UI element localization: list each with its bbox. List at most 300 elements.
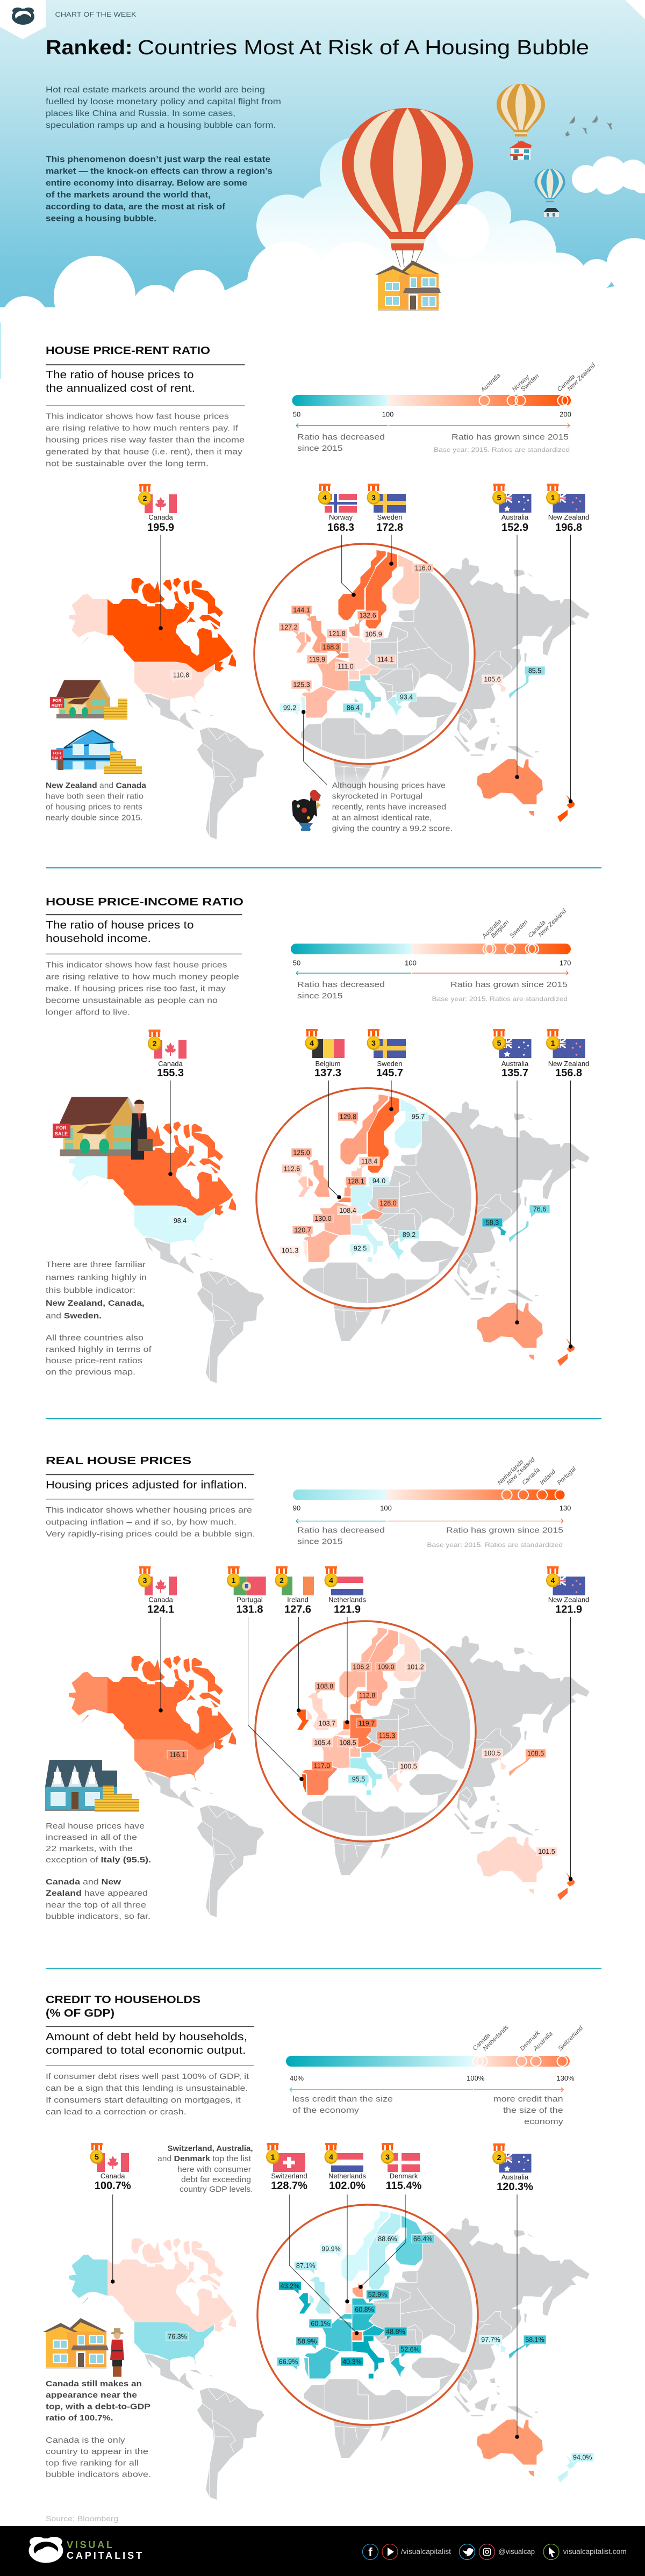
section 3 scale ticks: 100 (380, 1504, 392, 1512)
section 2 description: make. If housing prices rise too fast, it may (46, 984, 226, 994)
flag: Australia (492, 1029, 531, 1079)
for rent house illustration: RENT (52, 703, 63, 708)
section 2 scale country labels (481, 908, 568, 940)
flag: Switzerland: Switzerland (271, 2172, 307, 2180)
section 4 note: top five ranking for all (46, 2459, 139, 2468)
section 4 scale ticks: 40% (290, 2074, 304, 2082)
flag: Canada: 100.7% (95, 2180, 131, 2192)
section 3 scale country labels: Portugal (556, 1465, 577, 1486)
section 2 gradient scale (291, 944, 571, 954)
section 1 scale country labels (479, 362, 597, 394)
section 4 description (46, 2072, 249, 2117)
flag: New Zealand (546, 484, 589, 534)
section 3 description: This indicator shows whether housing prices are (46, 1506, 252, 1515)
flag: Netherlands: Netherlands (328, 2172, 367, 2180)
section 2 description: are rising relative to how much money people (46, 973, 239, 982)
section 4 note: Canada still makes an (46, 2380, 142, 2388)
section 2 world map (69, 1101, 590, 1383)
section 4 europe map (298, 2209, 496, 2442)
intro paragraph: Hot real estate markets around the world are being (46, 85, 265, 95)
section 1 scale ticks: 100 (382, 411, 393, 419)
section 1 subheading: The ratio of house prices to (46, 369, 194, 381)
orange balloon (497, 84, 545, 136)
section 4 heading (46, 1994, 200, 2019)
section 4 scale country labels: Australia (532, 2031, 554, 2053)
section 4 value labels: 52.6% (400, 2346, 420, 2354)
section 2 scale country labels: Sweden (509, 919, 529, 939)
section 1 scale country labels: Sweden (520, 373, 540, 393)
flag: Netherlands: 4 (329, 1576, 333, 1585)
section 4 scale country labels: Canada (472, 2032, 492, 2052)
section 2 axis captions: since 2015 (297, 991, 343, 1001)
flag: Australia: Australia (501, 2173, 529, 2181)
section 2 value labels: 101.3 (282, 1247, 298, 1254)
section 1 value labels: 168.3 (322, 644, 340, 651)
section 2 map area illustration: house and businessman: SALE (55, 1131, 68, 1136)
section 2 value labels: 95.7 (412, 1113, 425, 1121)
section 1 teal arrow (296, 423, 388, 428)
section 3 teal arrow (296, 1519, 386, 1523)
section 2 magnifier circle (256, 1088, 477, 1308)
flag: Denmark (381, 2143, 422, 2192)
section 4 axis captions (292, 2095, 563, 2126)
section 1 value labels: 116.0 (415, 564, 431, 572)
section 1 description (46, 412, 245, 468)
section 1 value labels (171, 564, 545, 716)
bold intro paragraph: This phenomenon doesn’t just warp the real estate (46, 155, 270, 164)
section 4 heading: CREDIT TO HOUSEHOLDS (46, 1994, 200, 2006)
section 4 subheading: Amount of debt held by households, (46, 2031, 247, 2043)
section 2 value labels: 98.4 (174, 1217, 187, 1225)
section 4 value labels: 87.1% (296, 2262, 315, 2270)
section 2 note: New Zealand, Canada, (46, 1299, 145, 1308)
section 3 note: near the top of all three (46, 1901, 146, 1910)
footer wordmark: VISUAL (67, 2539, 112, 2550)
section 3 scale ticks: 130 (560, 1504, 571, 1512)
section 3 value labels: 119.7 (359, 1719, 375, 1727)
section 3 value labels: 112.8 (359, 1692, 375, 1699)
flag: Canada (138, 484, 177, 534)
section 1 value labels: 114.1 (377, 656, 393, 663)
section 3 leader lines (161, 1617, 571, 1879)
section 4 value labels: 48.8% (386, 2328, 405, 2335)
social handles: visualcapitalist.com (563, 2548, 627, 2556)
flag: Australia (492, 484, 531, 534)
section 2 value labels: 76.6 (533, 1206, 546, 1213)
section 3 scale ticks: 90 (293, 1504, 300, 1512)
for sale house illustration: FOR (53, 751, 61, 755)
section 2 description: longer afford to live. (46, 1008, 130, 1017)
bold intro paragraph: of the markets around the world that, (46, 190, 211, 200)
flag: Australia: 152.9 (501, 522, 528, 534)
flag: New Zealand: New Zealand (548, 513, 589, 521)
section 4 value labels: 66.4% (413, 2235, 432, 2243)
section 2 scale ticks: 100 (405, 959, 417, 967)
heading rule (46, 2026, 254, 2027)
section 2 scale country labels: Canada (527, 919, 547, 939)
section 1 description: are rising relative to how much renters pay. If (46, 423, 239, 433)
flag: Sweden (367, 484, 406, 534)
section 1 scale country labels: New Zealand (567, 362, 597, 392)
flag: Australia: Australia (501, 1060, 529, 1068)
heading rule (46, 914, 242, 915)
for rent house illustration: FOR (53, 698, 61, 703)
section 2 orange arrow (412, 971, 568, 975)
section 2 subheading: household income. (46, 933, 151, 945)
for rent house illustration (50, 680, 127, 719)
section 2 leader lines (170, 1081, 571, 1347)
divider 2 (46, 1418, 601, 1419)
section 4 scale country labels: Switzerland (557, 2025, 585, 2052)
section 1 description: This indicator shows how fast house prices (46, 412, 229, 421)
flag: Canada (90, 2143, 131, 2192)
section 3 value labels: 108.5 (527, 1750, 544, 1757)
section 3 value labels: 109.0 (377, 1664, 395, 1671)
section 4 description: If consumers start defaulting on mortgages, it (46, 2096, 241, 2105)
section 1 value labels: 105.9 (365, 631, 382, 638)
flag: Netherlands: 4 (329, 2153, 333, 2161)
section 3 axis captions: Base year: 2015. Ratios are standardized (427, 1541, 563, 1549)
section 4 subheading (46, 2031, 247, 2056)
heading rule (46, 364, 245, 365)
footer logo icon (29, 2537, 63, 2563)
footer bar (0, 2526, 645, 2576)
section 1 subheading: the annualized cost of rent. (46, 383, 195, 394)
section 1 world map (69, 557, 590, 839)
section 2 scale ticks (293, 959, 571, 967)
section 2 scale country labels: Belgium (490, 919, 511, 939)
section 2 value labels: 58.3 (486, 1219, 499, 1226)
section 4 heading: (% OF GDP) (46, 2007, 114, 2019)
section 4 scale ticks: 100% (467, 2074, 485, 2082)
flag: Switzerland: 128.7% (271, 2180, 307, 2192)
flag: Ireland: 127.6 (284, 1604, 311, 1616)
section 2 value labels: 128.0 (379, 1199, 397, 1207)
flag: Sweden: 3 (371, 493, 376, 502)
social icon glyphs: f (368, 2545, 372, 2559)
flag: Netherlands (325, 2143, 367, 2192)
section 4 value labels: 40.3% (342, 2358, 362, 2365)
yellow twin house (375, 261, 441, 311)
section 4 note: appearance near the (46, 2391, 137, 2400)
section 2 value labels: 112.6 (284, 1165, 300, 1172)
bold intro paragraph: entire economy into disarray. Below are some (46, 178, 247, 188)
flag: Netherlands: 121.9 (334, 1604, 361, 1616)
portugal callout text: skyrocketed in Portugal (332, 793, 422, 801)
flag: Belgium: 137.3 (314, 1067, 341, 1079)
flag: Australia: 5 (497, 493, 501, 502)
section 2 note: There are three familiar (46, 1261, 146, 1269)
section 4 value labels: 66.9% (279, 2358, 298, 2365)
flag: Sweden: 172.8 (376, 522, 403, 534)
flag: New Zealand: New Zealand (548, 1596, 589, 1604)
section 1 axis captions: Ratio has decreased (297, 433, 385, 442)
flag: Canada: 2 (153, 1039, 157, 1048)
flag: Netherlands (325, 1566, 367, 1616)
main balloon (342, 108, 473, 250)
section 2 map area illustration: house and businessman: FOR (56, 1125, 67, 1131)
section 4 scale ticks (290, 2074, 575, 2082)
section 4 axis captions: economy (524, 2117, 563, 2126)
flag: Denmark: 3 (385, 2153, 390, 2161)
section 3 note (46, 1822, 151, 1921)
section 2 note: ranked highly in terms of (46, 1345, 152, 1354)
footer wordmark (67, 2539, 142, 2561)
subheading rule (46, 2065, 254, 2066)
footer wordmark: CAPITALIST (67, 2550, 142, 2561)
section 4 note: country to appear in the (46, 2448, 148, 2456)
section 1 axis captions: Base year: 2015. Ratios are standardized (434, 446, 570, 454)
section 2 subheading (46, 919, 194, 945)
section 2 description: This indicator shows how fast house prices (46, 961, 227, 970)
flag: Canada: 3 (143, 1576, 147, 1585)
section 2 value labels (170, 1112, 550, 1258)
section 2 description: become unsustainable as people can no (46, 996, 218, 1005)
section 4 scale ticks: 130% (556, 2074, 575, 2082)
switzerland australia denmark note: here with consumer (177, 2165, 251, 2174)
section 4 value labels: 58.1% (525, 2336, 544, 2344)
source: Source: Bloomberg (46, 2515, 118, 2523)
section 1 value labels: 85.5 (528, 667, 541, 675)
section 1 leader lines (161, 535, 571, 801)
section 1 value labels: 105.6 (484, 676, 501, 683)
social handles (401, 2548, 627, 2556)
switzerland australia denmark note: country GDP levels. (180, 2185, 253, 2194)
section 3 scale country labels: New Zealand (505, 1456, 536, 1486)
section 4 note (46, 2380, 151, 2479)
section 2 note: and Sweden. (46, 1312, 102, 1321)
section 3 note: increased in all of the (46, 1833, 137, 1842)
intro paragraph: speculation ramps up and a housing bubble can form. (46, 121, 276, 130)
flag: Canada: Canada (101, 2172, 125, 2180)
section 1 heading: HOUSE PRICE-RENT RATIO (46, 345, 210, 357)
flag: Switzerland (266, 2143, 307, 2192)
section 4 description: can be a sign that this lending is unsustainable. (46, 2084, 248, 2093)
section 3 scale country labels: Ireland (539, 1469, 557, 1486)
flag: Australia: 2 (497, 2153, 501, 2162)
flag: Sweden (367, 1029, 406, 1079)
section 4 description: can lead to a correction or crash. (46, 2107, 187, 2117)
section 3 axis captions: Ratio has decreased (297, 1526, 385, 1535)
section 4 teal arrow (290, 2088, 473, 2092)
flag: New Zealand: 1 (551, 1039, 555, 1047)
switzerland australia denmark note: Switzerland, Australia, (168, 2145, 253, 2153)
title: Ranked: (46, 37, 132, 59)
section 3 orange arrow (388, 1519, 563, 1523)
flag: Canada: 2 (143, 494, 147, 502)
section 4 axis captions: more credit than (493, 2095, 563, 2104)
section 1 orange arrow (389, 423, 570, 428)
section 2 teal arrow (296, 971, 411, 975)
flag: Switzerland: 1 (271, 2153, 275, 2161)
section 1 scale ticks: 50 (293, 411, 300, 419)
section 4 leader lines (113, 2194, 517, 2437)
flag: Portugal: 1 (232, 1576, 236, 1585)
flag: New Zealand: 156.8 (555, 1067, 582, 1079)
subheading rule (46, 405, 245, 406)
portugal callout text: at an almost identical rate, (332, 814, 432, 823)
section 1: house price-rent ratio (46, 345, 597, 839)
bold intro paragraph: market — the knock-on effects can throw a region’s (46, 167, 273, 176)
section 4 scale country labels: Denmark (519, 2030, 542, 2052)
section 2 map area illustration: house and businessman (53, 1097, 153, 1160)
section 3 axis captions: Ratio has grown since 2015 (446, 1526, 563, 1535)
section 4: credit to households (43, 1994, 594, 2500)
section 1 scale ticks (293, 411, 571, 419)
title: Countries Most At Risk of A Housing Bubble (138, 37, 589, 59)
section 4 axis captions: of the economy (292, 2106, 360, 2115)
section 1 value labels: 99.2 (283, 704, 296, 711)
section 1 value labels: 121.8 (328, 630, 346, 637)
new zealand and canada note: have both seen their ratio (46, 793, 144, 801)
section 1 description: generated by that house (i.e. rent), then it may (46, 447, 243, 456)
flag: New Zealand: 4 (551, 1576, 555, 1585)
flag: Canada: Canada (148, 513, 174, 521)
flag: New Zealand (546, 1566, 589, 1616)
flag: New Zealand: 121.9 (555, 1604, 582, 1616)
fade behind callout (328, 773, 392, 797)
flag: Netherlands: 102.0% (329, 2180, 366, 2192)
section 2 value labels: 129.8 (340, 1113, 356, 1121)
section 2 value labels: 130.0 (314, 1215, 332, 1222)
section 3 value labels: 115.3 (379, 1732, 395, 1740)
section 2 note (46, 1261, 152, 1377)
left edge strip (0, 322, 1, 379)
flag: Canada (148, 1030, 187, 1079)
section 4 value labels: 60.1% (311, 2320, 330, 2328)
section 4 value labels: 58.9% (298, 2337, 317, 2345)
section 3 europe map (296, 1625, 494, 1858)
flag: New Zealand (546, 1029, 589, 1079)
section 1 description: housing prices rise way faster than the income (46, 435, 245, 444)
section 1 value labels: 86.4 (347, 704, 360, 711)
section 2 dots (168, 1107, 572, 1349)
right cloud (572, 156, 645, 195)
section 2 axis captions (297, 980, 568, 1003)
section 2 description (46, 961, 239, 1017)
section 2 axis captions: Base year: 2015. Ratios are standardized (432, 995, 568, 1003)
section 2 axis captions: Ratio has grown since 2015 (450, 980, 568, 989)
switzerland australia denmark note: and Denmark top the list (157, 2155, 251, 2163)
section 2 heading: HOUSE PRICE-INCOME RATIO (46, 896, 243, 908)
section 2 scale ticks: 170 (560, 959, 571, 967)
section 4 dots (111, 2279, 519, 2439)
section 3 axis captions: since 2015 (297, 1537, 343, 1546)
section 3 note: Real house prices have (46, 1822, 145, 1831)
section 4 value labels: 43.2% (281, 2283, 299, 2290)
section 1 value labels: 93.4 (400, 693, 413, 701)
flag: Australia: 120.3% (497, 2181, 533, 2193)
section 2 value labels: 94.0 (372, 1177, 385, 1185)
section 3 description (46, 1506, 255, 1538)
for sale house illustration: SALE (52, 755, 62, 760)
section 3 note: Canada and New (46, 1878, 121, 1887)
section 3 value labels: 95.5 (352, 1775, 365, 1783)
social handles: /visualcapitalist (401, 2548, 451, 2556)
flag: Canada: Canada (158, 1060, 183, 1068)
section 4 value labels: 94.0% (573, 2453, 592, 2461)
section 2 value labels: 120.7 (294, 1226, 311, 1234)
section 2 axis captions: Ratio has decreased (297, 980, 385, 989)
flag: Canada (138, 1566, 177, 1616)
section 3 note: Zealand have appeared (46, 1889, 148, 1898)
section 4 value labels: 52.9% (368, 2291, 387, 2299)
section 3 value labels: 100.5 (400, 1762, 417, 1770)
section 3 value labels: 116.1 (169, 1751, 185, 1759)
teal house with coins illustration (45, 1760, 139, 1812)
flag: Canada: Canada (148, 1596, 174, 1604)
section 4 gradient scale (286, 2056, 570, 2067)
flag: Portugal: 131.8 (236, 1604, 263, 1616)
divider 1 (46, 867, 601, 868)
flag: Canada: 124.1 (147, 1604, 174, 1616)
back cloud (256, 137, 589, 312)
flag: Ireland: Ireland (287, 1596, 309, 1604)
section 1 value labels: 119.9 (309, 656, 325, 663)
foreground cloud (0, 204, 645, 343)
heading rule (46, 1474, 254, 1475)
section 4 value labels: 60.8% (355, 2306, 374, 2314)
section 3 scale country labels: Canada (521, 1467, 541, 1486)
flag: New Zealand: 196.8 (555, 522, 582, 534)
bold intro paragraph (46, 155, 273, 224)
section 1 dots (159, 562, 572, 803)
flag: Sweden: Sweden (377, 1060, 402, 1068)
section 2 value labels: 89.2 (403, 1231, 415, 1239)
section 1 value labels: 110.8 (173, 672, 189, 679)
section 4 value labels: 97.7% (481, 2336, 500, 2344)
portugal callout text: recently, rents have increased (332, 803, 446, 812)
flag: Netherlands: Netherlands (328, 1596, 367, 1604)
section 2 note: on the previous map. (46, 1368, 135, 1377)
section 4 axis captions: less credit than the size (292, 2095, 393, 2104)
section 4 value labels: 88.6% (378, 2235, 397, 2243)
section 3 world map (69, 1635, 590, 1917)
balloon ropes (395, 250, 422, 267)
flag: Australia: 135.7 (501, 1067, 528, 1079)
section 2 value labels: 125.0 (293, 1149, 310, 1156)
section 1 axis captions: since 2015 (297, 444, 343, 453)
portugal callout text (332, 782, 453, 833)
flag: Australia (492, 2143, 533, 2193)
section 1 scale country labels: Norway (511, 373, 531, 393)
flag: Ireland (275, 1566, 314, 1616)
flag: Sweden: 145.7 (376, 1067, 403, 1079)
section 2 note: names ranking highly in (46, 1273, 147, 1282)
white house under orange balloon (509, 141, 532, 160)
section 3 value labels: 101.2 (407, 1664, 424, 1671)
yellow twin house illustration (43, 2318, 109, 2369)
section 2 note: All three countries also (46, 1334, 144, 1343)
section 1 scale ticks: 200 (560, 411, 571, 419)
flag: Denmark: 115.4% (386, 2180, 422, 2192)
section 1 value labels: 125.3 (293, 681, 310, 689)
section 3 value labels: 106.2 (353, 1664, 370, 1671)
section 1 gradient scale (292, 395, 572, 406)
section 2 scale ticks: 50 (293, 959, 300, 967)
logo tab (0, 0, 46, 39)
section 3 value labels: 103.7 (319, 1719, 335, 1727)
switzerland australia denmark note (157, 2145, 253, 2194)
section 3 scale country labels (497, 1456, 577, 1486)
section 1 scale country labels: Canada (556, 373, 577, 393)
flag: Belgium: 4 (310, 1039, 314, 1047)
flag: Belgium (305, 1029, 345, 1079)
section 4 world map (69, 2218, 590, 2500)
section 2 scale country labels: Australia (481, 918, 503, 940)
section 4 note: ratio of 100.7%. (46, 2414, 113, 2422)
section 4 value labels: 99.9% (321, 2245, 341, 2253)
